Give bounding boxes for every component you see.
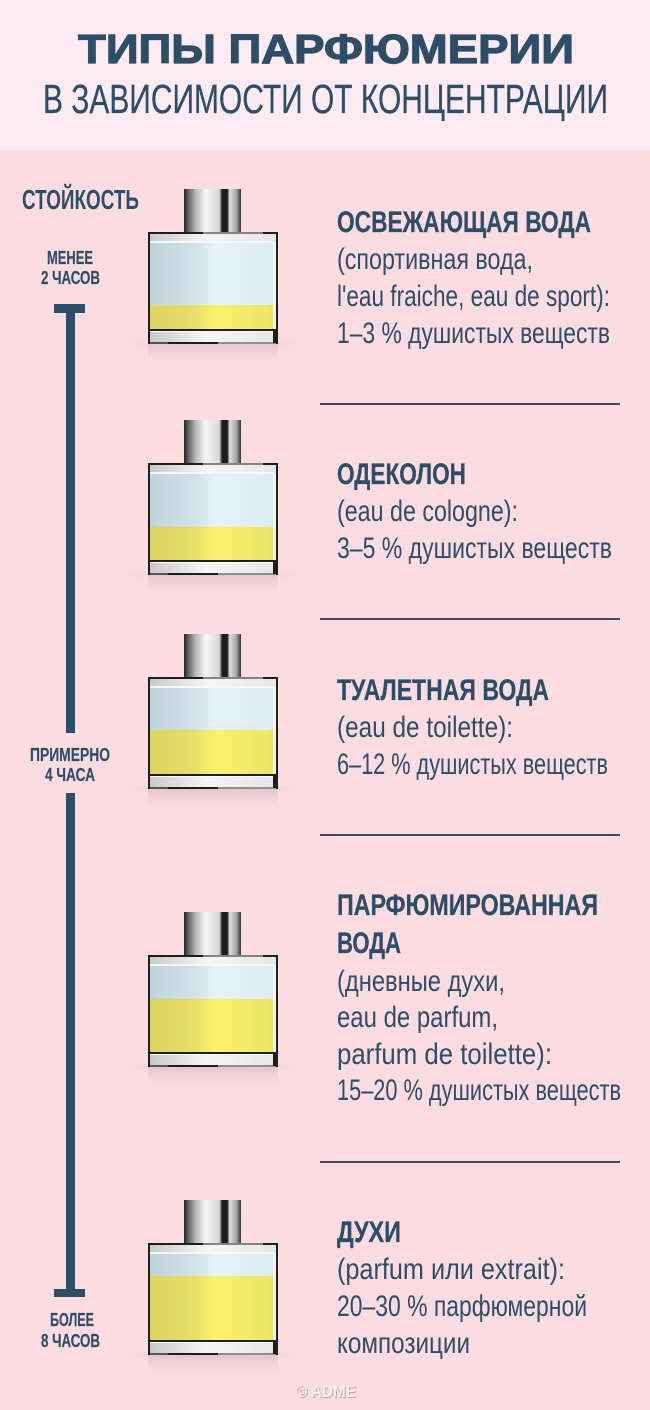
text: eau de parfum: eau de parfum, — [337, 1001, 498, 1034]
text: eau de parfum: ВОДА — [337, 927, 401, 960]
label: less than 2 hours: 2 ЧАСОВ — [41, 267, 100, 288]
text: eau de parfum — [337, 889, 621, 1107]
text: cologne: (eau de cologne): — [337, 495, 518, 528]
text: fresh water — [337, 206, 610, 350]
durability heading: СТОЙКОСТЬ — [22, 183, 139, 215]
bottle 1 — [113, 189, 313, 360]
text: parfum: (parfum или extrait): — [337, 1253, 565, 1286]
text: parfum — [337, 1216, 587, 1360]
title: ТИПЫ ПАРФЮМЕРИИ — [78, 26, 574, 72]
text: fresh water: (спортивная вода, — [337, 243, 533, 276]
text: eau de parfum: parfum de toilette): — [337, 1038, 552, 1071]
title — [43, 26, 608, 122]
header band — [0, 0, 650, 150]
text: cologne: ОДЕКОЛОН — [337, 458, 466, 491]
label: more than 8 hours — [41, 1309, 100, 1351]
text: eau de parfum: (дневные духи, — [337, 965, 505, 998]
label: less than 2 hours — [41, 247, 100, 288]
text: eau de toilette: ТУАЛЕТНАЯ ВОДА — [337, 674, 549, 707]
bottle 4 — [113, 912, 313, 1083]
label: about 4 hours: 4 ЧАСА — [45, 764, 95, 785]
label: about 4 hours — [30, 744, 110, 785]
bottle 3 — [113, 634, 313, 805]
watermark: © ADME — [296, 1383, 356, 1401]
text: eau de toilette — [337, 674, 608, 781]
label: more than 8 hours: БОЛЕЕ — [50, 1309, 94, 1330]
bottle 5 — [113, 1200, 313, 1371]
label: less than 2 hours: МЕНЕЕ — [47, 247, 93, 268]
durability timeline — [54, 304, 85, 1297]
text: parfum: композиции — [337, 1327, 470, 1360]
text: cologne — [337, 458, 612, 565]
text: parfum: ДУХИ — [337, 1216, 401, 1249]
label: about 4 hours: ПРИМЕРНО — [30, 744, 110, 765]
text: eau de toilette: (eau de toilette): — [337, 711, 513, 744]
bottle 2 — [113, 420, 313, 591]
label: more than 8 hours: 8 ЧАСОВ — [41, 1330, 100, 1351]
